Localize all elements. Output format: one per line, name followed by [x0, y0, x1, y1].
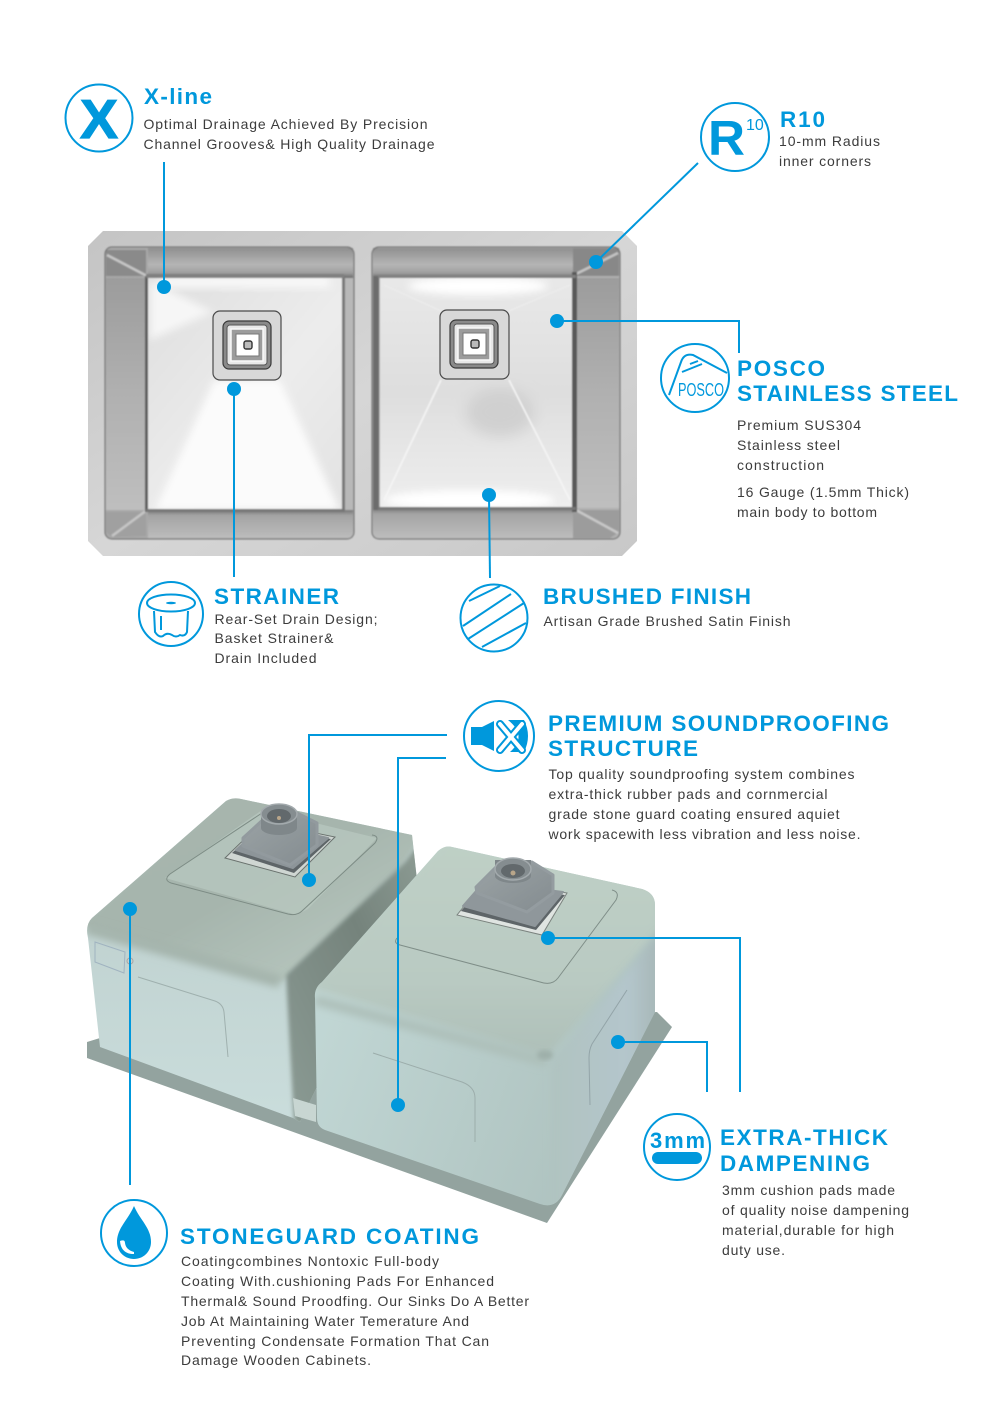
- text block: stoneguard coating: Coatingcombines Nontoxic Full-body: [181, 1253, 439, 1269]
- text block: POSCO stainless steel: main body to bottom: [737, 504, 877, 520]
- icon: water drop: [101, 1200, 167, 1266]
- text block: premium soundproofing: STRUCTURE: [548, 736, 698, 761]
- text block: POSCO stainless steel: 16 Gauge (1.5mm Thick): [737, 484, 909, 500]
- text block: premium soundproofing: PREMIUM SOUNDPROOFING: [548, 711, 889, 736]
- text block: premium soundproofing: Top quality soundproofing system combines: [548, 766, 854, 782]
- text block: POSCO stainless steel: Stainless steel: [737, 437, 840, 453]
- right bowl underside: [310, 838, 660, 1215]
- leader: soundproofing upper: [302, 735, 447, 887]
- text block: stoneguard coating: Thermal& Sound Proodfing. Our Sinks Do A Better: [181, 1293, 529, 1309]
- text block: extra-thick dampening: DAMPENING: [720, 1151, 870, 1176]
- leader: X-line: [157, 162, 171, 294]
- icon: R10: [701, 103, 769, 171]
- text block: strainer: Rear-Set Drain Design;: [214, 611, 378, 627]
- icon: 3mm: [644, 1114, 710, 1180]
- text block: extra-thick dampening: duty use.: [722, 1242, 785, 1258]
- right drain: [440, 310, 509, 379]
- icon: brushed finish: [460, 584, 528, 652]
- text block: R10: [779, 107, 880, 169]
- text block: extra-thick dampening: [720, 1125, 909, 1258]
- photo: underside of sink with coating: [80, 790, 672, 1223]
- text block: POSCO stainless steel: [737, 356, 958, 520]
- leader: POSCO: [550, 314, 739, 353]
- text block: premium soundproofing: extra-thick rubber pads and cornmercial: [548, 786, 828, 802]
- left drain: [213, 311, 281, 380]
- text block: POSCO stainless steel: construction: [737, 457, 824, 473]
- left bowl: [105, 247, 354, 539]
- photo: stainless steel double sink, top view: [88, 231, 637, 556]
- text block: strainer: Drain Included: [214, 650, 316, 666]
- text block: brushed finish: BRUSHED FINISH: [543, 584, 751, 609]
- right bowl: [372, 247, 620, 539]
- text block: X-line: [144, 84, 435, 152]
- flange: [87, 1012, 672, 1223]
- text block: stoneguard coating: Damage Wooden Cabinets.: [181, 1352, 371, 1368]
- text block: R10: 10-mm Radius: [779, 133, 880, 149]
- icon: POSCO: POSCO: [678, 380, 724, 400]
- text block: X-line: X-line: [144, 84, 212, 109]
- icon: X-line: X: [80, 88, 118, 150]
- leader: soundproofing lower: [391, 758, 446, 1112]
- text block: R10: R10: [780, 107, 825, 132]
- text block: stoneguard coating: Preventing Condensate Formation That Can: [181, 1333, 489, 1349]
- text block: extra-thick dampening: 3mm cushion pads made: [722, 1182, 895, 1198]
- text block: brushed finish: Artisan Grade Brushed Satin Finish: [544, 613, 790, 629]
- text block: stoneguard coating: Coating With.cushioning Pads For Enhanced: [181, 1273, 494, 1289]
- leader: brushed finish: [482, 488, 496, 578]
- leader: strainer: [227, 382, 241, 577]
- text block: extra-thick dampening: of quality noise dampening: [722, 1202, 909, 1218]
- icon: R10: R: [708, 112, 745, 166]
- text block: X-line: Channel Grooves& High Quality Drainage: [144, 136, 435, 152]
- left bowl underside: [80, 790, 425, 1130]
- text block: X-line: Optimal Drainage Achieved By Precision: [144, 116, 428, 132]
- text block: POSCO stainless steel: Premium SUS304: [737, 417, 861, 433]
- text block: strainer: STRAINER: [214, 584, 339, 609]
- icon: X-line: [66, 84, 132, 152]
- text block: strainer: [214, 584, 378, 666]
- text block: premium soundproofing: grade stone guard coating ensured aquiet: [548, 806, 840, 822]
- text block: extra-thick dampening: EXTRA-THICK: [720, 1125, 889, 1150]
- text block: premium soundproofing: work spacewith less vibration and less noise.: [548, 826, 860, 842]
- text block: premium soundproofing: [548, 711, 889, 842]
- leader: dampening upper: [541, 931, 740, 1092]
- icon: R10: 10: [746, 117, 764, 134]
- text block: stoneguard coating: Job At Maintaining Water Temerature And: [181, 1313, 469, 1329]
- icon: 3mm: 3mm: [650, 1128, 705, 1153]
- left drain housing: [225, 804, 335, 877]
- leader: R10: [589, 163, 698, 269]
- icon: POSCO: [661, 344, 729, 412]
- icon: strainer: [139, 582, 203, 646]
- text block: extra-thick dampening: material,durable for high: [722, 1222, 894, 1238]
- leader: dampening lower: [611, 1035, 707, 1092]
- text block: POSCO stainless steel: POSCO: [737, 356, 825, 381]
- text block: brushed finish: [543, 584, 790, 629]
- icon: soundproofing: [464, 701, 534, 771]
- leader: stoneguard: [123, 902, 137, 1185]
- text block: POSCO stainless steel: STAINLESS STEEL: [737, 381, 958, 406]
- text block: R10: inner corners: [779, 153, 871, 169]
- right drain housing: [457, 858, 567, 935]
- text block: stoneguard coating: [180, 1224, 529, 1368]
- text block: strainer: Basket Strainer&: [214, 630, 334, 646]
- text block: stoneguard coating: STONEGUARD COATING: [180, 1224, 479, 1249]
